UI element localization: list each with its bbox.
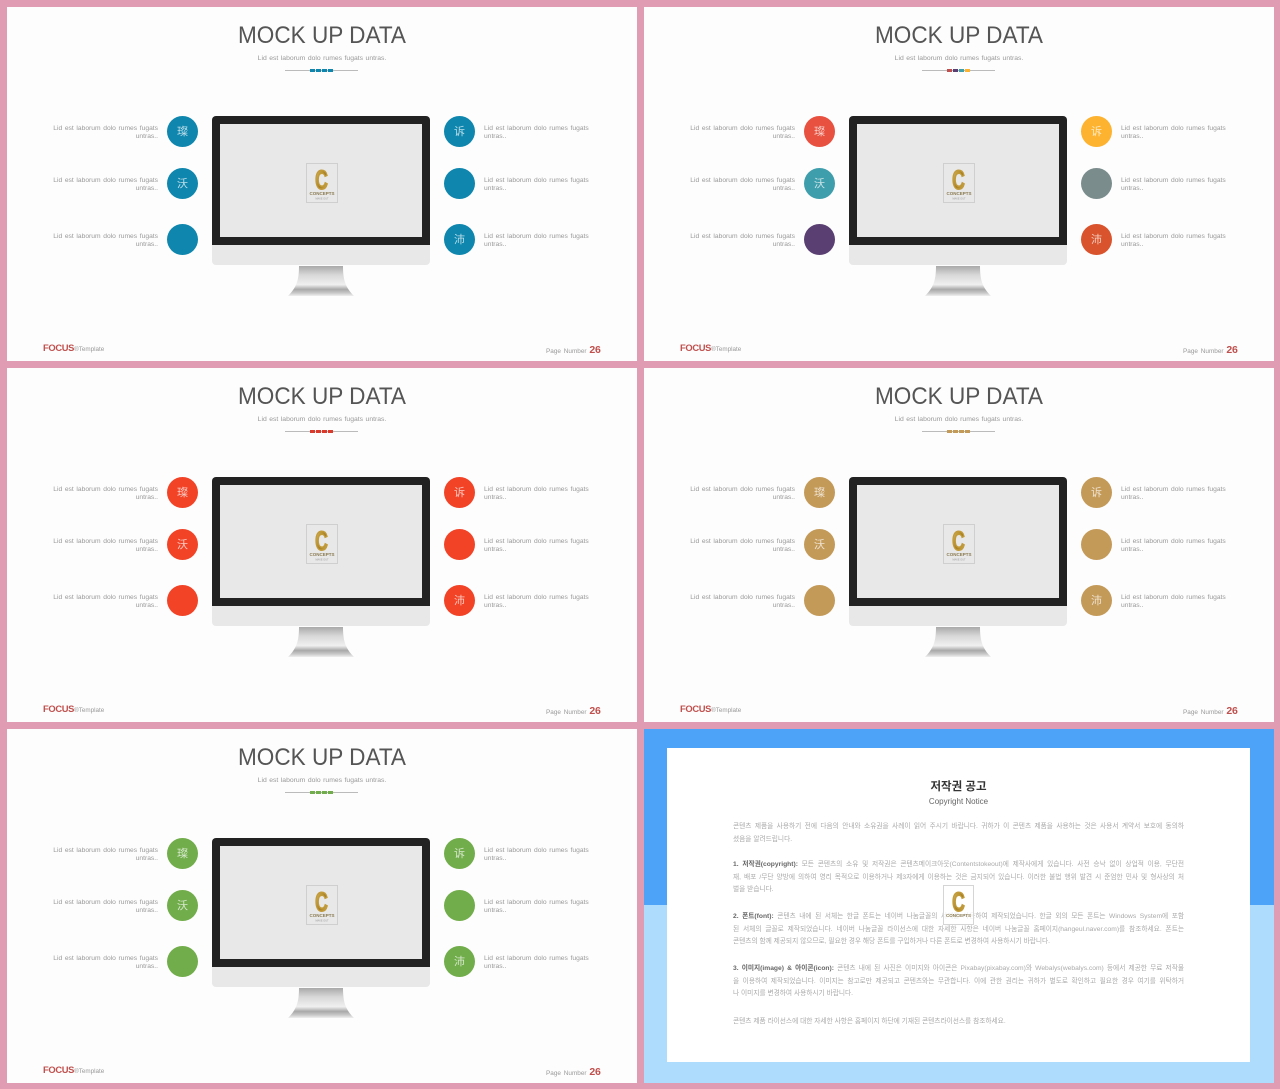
left circle icon 1 bbox=[167, 838, 198, 869]
title: MOCK UP DATA bbox=[875, 382, 1043, 410]
left circle icon 1 bbox=[804, 116, 835, 147]
left text 1: Lid est laborum dolo rumes fugats bbox=[53, 125, 158, 132]
panel: copyright notice bbox=[644, 729, 1274, 1083]
right circle icon 1: 诉 bbox=[454, 487, 465, 499]
left text 3 bbox=[53, 594, 158, 609]
right text 3 bbox=[484, 594, 589, 609]
logo overlay: C bbox=[952, 886, 965, 917]
subtitle: Lid est laborum dolo rumes fugats untras. bbox=[258, 776, 386, 784]
left text 3: untras.. bbox=[773, 241, 795, 248]
left text 3: untras.. bbox=[136, 602, 158, 609]
notice subheading: Copyright Notice bbox=[929, 797, 988, 806]
section 1 copyright bbox=[733, 859, 1184, 897]
left text 1 bbox=[53, 486, 158, 501]
right text 1 bbox=[484, 486, 589, 501]
left text 3: Lid est laborum dolo rumes fugats bbox=[690, 233, 795, 240]
left text 2: Lid est laborum dolo rumes fugats bbox=[690, 538, 795, 545]
right text 1 bbox=[484, 847, 624, 862]
left text 3 bbox=[53, 233, 158, 248]
monitor mockup: MAKE OUT bbox=[315, 920, 329, 922]
monitor mockup: MAKE OUT bbox=[952, 558, 966, 562]
monitor mockup: C bbox=[952, 525, 965, 556]
subtitle: Lid est laborum dolo rumes fugats untras. bbox=[895, 416, 1023, 422]
left text 3: untras.. bbox=[773, 602, 795, 609]
right circle icon 1: 诉 bbox=[454, 848, 465, 860]
left text 2: untras.. bbox=[136, 546, 158, 553]
intro paragraph bbox=[733, 821, 1184, 846]
title: MOCK UP DATA bbox=[238, 744, 406, 770]
right text 1: untras.. bbox=[1121, 133, 1143, 140]
monitor mockup: CONCEPTS bbox=[946, 552, 972, 557]
subtitle: Lid est laborum dolo rumes fugats untras. bbox=[895, 54, 1023, 62]
left circle icon 2 bbox=[167, 529, 198, 560]
right text 3 bbox=[1121, 233, 1226, 248]
right text 3: Lid est laborum dolo rumes fugats bbox=[484, 594, 589, 601]
right text 1: untras.. bbox=[484, 855, 506, 862]
left text 3: Lid est laborum dolo rumes fugats bbox=[53, 594, 158, 601]
left text 3: Lid est laborum dolo rumes fugats bbox=[53, 955, 158, 962]
right text 1: untras.. bbox=[484, 494, 506, 501]
left circle icon 2 bbox=[167, 890, 198, 921]
left circle icon 2: 沃 bbox=[814, 539, 825, 551]
left text 3: untras.. bbox=[136, 963, 158, 970]
right text 1: untras.. bbox=[484, 133, 506, 140]
footer brand: FOCUS®Template bbox=[43, 342, 104, 353]
panel: slide 2 multicolour bbox=[644, 7, 1274, 361]
left text 1 bbox=[690, 125, 795, 140]
monitor mockup: MAKE OUT bbox=[315, 558, 329, 562]
footer brand: FOCUS®Template bbox=[680, 342, 741, 353]
right text 2 bbox=[484, 177, 589, 192]
left circle icon 2 bbox=[804, 529, 835, 560]
left circle icon 3 bbox=[167, 585, 198, 616]
monitor mockup: MAKE OUT bbox=[952, 198, 966, 200]
left text 1: Lid est laborum dolo rumes fugats bbox=[53, 847, 158, 854]
left text 1: Lid est laborum dolo rumes fugats bbox=[53, 486, 158, 493]
monitor mockup: MAKE OUT bbox=[315, 198, 329, 200]
right text 2 bbox=[484, 538, 589, 553]
right circle icon 2 bbox=[1081, 529, 1112, 560]
right text 3: Lid est laborum dolo rumes fugats bbox=[1121, 594, 1226, 601]
right circle icon 1 bbox=[1081, 116, 1112, 147]
intro paragraph: 셨음을 알려드립니다. bbox=[733, 836, 792, 843]
left circle icon 1 bbox=[167, 116, 198, 147]
right text 3 bbox=[1121, 594, 1226, 609]
title: MOCK UP DATA bbox=[238, 382, 406, 410]
section 3 image and icon bbox=[733, 963, 1184, 1001]
left text 2 bbox=[7, 899, 158, 914]
section 3 image and icon: 3. 이미지(image) & 아이콘(icon): 콘텐츠 내에 된 사진은 이미지와 아이콘은 Pixabay(pixabay.com)와 Webalys(webalys.com) 등에서 제공한 무료 저작물 bbox=[733, 965, 1184, 972]
closing line: 콘텐츠 제품 라이선스에 대한 자세한 사항은 홈페이지 하단에 기재된 콘텐츠라이선스를 참조하세요. bbox=[733, 1018, 1006, 1025]
right text 1: untras.. bbox=[1121, 494, 1143, 501]
monitor mockup: C bbox=[315, 525, 328, 556]
logo overlay: CONCEPTS bbox=[946, 913, 971, 918]
right circle icon 1 bbox=[444, 477, 475, 508]
right text 2 bbox=[484, 899, 624, 914]
title: MOCK UP DATA bbox=[238, 22, 406, 48]
right text 3: Lid est laborum dolo rumes fugats bbox=[1121, 233, 1226, 240]
left circle icon 1: 璨 bbox=[177, 126, 188, 138]
section 2 font: 콘텐츠의 함께 제공되지 않으므로, 필요한 경우 해당 폰트를 구입하거나 다른 폰트로 변경하여 사용하시기 바랍니다. bbox=[733, 938, 1050, 945]
left text 3 bbox=[7, 955, 158, 970]
left circle icon 3 bbox=[804, 224, 835, 255]
left text 2 bbox=[53, 177, 158, 192]
monitor mockup: CONCEPTS bbox=[309, 552, 335, 557]
left text 2: Lid est laborum dolo rumes fugats bbox=[53, 899, 158, 906]
right circle icon 2 bbox=[444, 529, 475, 560]
right text 3: Lid est laborum dolo rumes fugats bbox=[484, 233, 589, 240]
subtitle: Lid est laborum dolo rumes fugats untras. bbox=[258, 416, 386, 422]
right circle icon 3 bbox=[444, 224, 475, 255]
right text 2: Lid est laborum dolo rumes fugats bbox=[484, 538, 589, 545]
title divider bbox=[922, 430, 995, 433]
right text 1: Lid est laborum dolo rumes fugats bbox=[484, 125, 589, 132]
left text 2 bbox=[53, 538, 158, 553]
left text 1: untras.. bbox=[136, 855, 158, 862]
left text 1: untras.. bbox=[773, 494, 795, 501]
title divider bbox=[285, 791, 358, 794]
right text 3: untras.. bbox=[484, 963, 506, 970]
right text 2: Lid est laborum dolo rumes fugats bbox=[1121, 177, 1226, 184]
right circle icon 3: 沛 bbox=[1091, 595, 1102, 607]
left text 2: untras.. bbox=[773, 185, 795, 192]
left text 3 bbox=[690, 233, 795, 248]
left text 1 bbox=[690, 486, 795, 501]
left text 3: Lid est laborum dolo rumes fugats bbox=[53, 233, 158, 240]
monitor mockup: CONCEPTS bbox=[946, 191, 972, 196]
left text 2: Lid est laborum dolo rumes fugats bbox=[690, 177, 795, 184]
right text 2: untras.. bbox=[1121, 546, 1143, 553]
left circle icon 2 bbox=[167, 168, 198, 199]
left circle icon 1: 璨 bbox=[177, 848, 188, 860]
right circle icon 3: 沛 bbox=[454, 595, 465, 607]
intro paragraph: 콘텐츠 제품을 사용하기 전에 다음의 안내와 소유권을 사례이 읽어 주시기 바랍니다. 귀하가 이 콘텐츠 제품을 사용하는 것은 사용서 계약서 보호에 동의하 bbox=[733, 823, 1184, 830]
left text 2 bbox=[690, 538, 795, 553]
right circle icon 1 bbox=[444, 838, 475, 869]
left text 2 bbox=[690, 177, 795, 192]
left circle icon 1: 璨 bbox=[814, 487, 825, 499]
footer brand: FOCUS®Template bbox=[680, 703, 741, 714]
left text 2: untras.. bbox=[773, 546, 795, 553]
left circle icon 2: 沃 bbox=[177, 900, 188, 912]
monitor mockup: CONCEPTS bbox=[309, 191, 335, 196]
notice heading: 저작권 공고 bbox=[930, 781, 987, 793]
monitor mockup bbox=[849, 116, 1067, 296]
left text 3: untras.. bbox=[136, 241, 158, 248]
section 3 image and icon: 나 이미지를 변경하여 사용하시기 바랍니다. bbox=[733, 990, 853, 997]
left circle icon 2: 沃 bbox=[177, 539, 188, 551]
monitor mockup bbox=[212, 838, 430, 1020]
monitor mockup bbox=[849, 477, 1067, 657]
right circle icon 3 bbox=[1081, 585, 1112, 616]
right text 1: Lid est laborum dolo rumes fugats bbox=[1121, 486, 1226, 493]
section 2 font: 된 서체의 글꼴로 제작되었습니다. 네이버 나눔글꼴 라이선스에 대한 자세한 사항은 네이버 나눔글꼴 홈페이지(hangeul.naver.com)를 참조하세요. 폰트는 bbox=[733, 926, 1184, 933]
title divider bbox=[285, 430, 358, 433]
right text 1: Lid est laborum dolo rumes fugats bbox=[1121, 125, 1226, 132]
section 3 image and icon: 을 이용하여 제작되었습니다. 이미지는 참고로만 제공되고 콘텐츠와는 무관합니다. 이에 관한 권리는 귀하가 별도로 확인하고 필요한 경우 여기를 위탁하거 bbox=[733, 978, 1184, 985]
right circle icon 3: 沛 bbox=[1091, 234, 1102, 246]
panel: slide 1 teal bbox=[7, 7, 637, 361]
subtitle: Lid est laborum dolo rumes fugats untras. bbox=[258, 54, 386, 62]
title divider bbox=[922, 69, 995, 72]
left circle icon 2: 沃 bbox=[177, 178, 188, 190]
monitor mockup: C bbox=[315, 886, 328, 917]
notice card bbox=[667, 748, 1250, 1062]
right circle icon 2 bbox=[444, 890, 475, 921]
left circle icon 3 bbox=[167, 946, 198, 977]
page number: Page Number 26 bbox=[546, 705, 601, 717]
right text 1 bbox=[1121, 486, 1226, 501]
right text 2 bbox=[1121, 538, 1226, 553]
right text 2: untras.. bbox=[484, 907, 506, 914]
right text 2: Lid est laborum dolo rumes fugats bbox=[484, 899, 589, 906]
left text 1: untras.. bbox=[136, 494, 158, 501]
right circle icon 1: 诉 bbox=[454, 126, 465, 138]
left text 3 bbox=[690, 594, 795, 609]
right circle icon 2 bbox=[1081, 168, 1112, 199]
right circle icon 1: 诉 bbox=[1091, 487, 1102, 499]
section 1 copyright: 벌을 받습니다. bbox=[733, 886, 774, 893]
monitor mockup: C bbox=[952, 164, 965, 195]
left text 2: Lid est laborum dolo rumes fugats bbox=[53, 177, 158, 184]
right text 3: untras.. bbox=[1121, 241, 1143, 248]
right text 1: Lid est laborum dolo rumes fugats bbox=[484, 847, 589, 854]
right text 2: Lid est laborum dolo rumes fugats bbox=[484, 177, 589, 184]
left circle icon 1: 璨 bbox=[177, 487, 188, 499]
right circle icon 1 bbox=[1081, 477, 1112, 508]
title: MOCK UP DATA bbox=[875, 22, 1043, 48]
left circle icon 1 bbox=[804, 477, 835, 508]
left text 1: Lid est laborum dolo rumes fugats bbox=[690, 486, 795, 493]
right circle icon 2 bbox=[444, 168, 475, 199]
monitor mockup: C bbox=[315, 164, 328, 195]
title divider bbox=[285, 69, 358, 72]
right circle icon 3 bbox=[1081, 224, 1112, 255]
left text 2: Lid est laborum dolo rumes fugats bbox=[53, 538, 158, 545]
left circle icon 1 bbox=[167, 477, 198, 508]
right circle icon 3 bbox=[444, 585, 475, 616]
right text 3: untras.. bbox=[1121, 602, 1143, 609]
monitor mockup bbox=[212, 116, 430, 296]
panel: slide 5 green bbox=[7, 729, 637, 1083]
left circle icon 2 bbox=[804, 168, 835, 199]
monitor mockup bbox=[212, 477, 430, 657]
section 2 font bbox=[733, 911, 1184, 949]
left circle icon 1: 璨 bbox=[814, 126, 825, 138]
left circle icon 3 bbox=[167, 224, 198, 255]
section 1 copyright: 1. 저작권(copyright): 모든 콘텐츠의 소유 및 저작권은 콘텐츠메이크아웃(Contentstokeout)에 제작사에게 있습니다. 사전 승낙 없이 상업적 이용, 무단전 bbox=[733, 861, 1184, 868]
right text 1 bbox=[1121, 125, 1226, 140]
left text 1: untras.. bbox=[773, 133, 795, 140]
right circle icon 1: 诉 bbox=[1091, 126, 1102, 138]
right circle icon 3: 沛 bbox=[454, 956, 465, 968]
left circle icon 3 bbox=[804, 585, 835, 616]
page number: Page Number 26 bbox=[546, 1066, 601, 1078]
footer brand: FOCUS®Template bbox=[43, 703, 104, 714]
right text 3 bbox=[484, 233, 589, 248]
left text 1: Lid est laborum dolo rumes fugats bbox=[690, 125, 795, 132]
left text 2: untras.. bbox=[136, 185, 158, 192]
right text 2: untras.. bbox=[1121, 185, 1143, 192]
right text 1: Lid est laborum dolo rumes fugats bbox=[484, 486, 589, 493]
right text 2: Lid est laborum dolo rumes fugats bbox=[1121, 538, 1226, 545]
right text 1 bbox=[484, 125, 589, 140]
page number: Page Number 26 bbox=[1183, 344, 1238, 356]
right text 2: untras.. bbox=[484, 546, 506, 553]
right text 3: untras.. bbox=[484, 602, 506, 609]
left text 3: Lid est laborum dolo rumes fugats bbox=[690, 594, 795, 601]
monitor mockup: CONCEPTS bbox=[309, 913, 335, 918]
right circle icon 3: 沛 bbox=[454, 234, 465, 246]
left circle icon 2: 沃 bbox=[814, 178, 825, 190]
right text 3 bbox=[484, 955, 624, 970]
footer brand: FOCUS®Template bbox=[43, 1064, 104, 1075]
right text 2: untras.. bbox=[484, 185, 506, 192]
panel: slide 3 red bbox=[7, 368, 637, 722]
section 2 font: 2. 폰트(font): 콘텐츠 내에 된 서체는 한글 폰트는 네이버 나눔글꼴의 서체를 사용하여 제작되었습니다. 한글 외의 모든 폰트는 Windows System에 포함 bbox=[733, 913, 1184, 920]
right circle icon 3 bbox=[444, 946, 475, 977]
right text 2 bbox=[1121, 177, 1226, 192]
panel: slide 4 tan bbox=[644, 368, 1274, 722]
logo overlay bbox=[943, 885, 974, 925]
page number: Page Number 26 bbox=[1183, 705, 1238, 717]
page number: Page Number 26 bbox=[546, 344, 601, 356]
left text 1: untras.. bbox=[136, 133, 158, 140]
left text 2: untras.. bbox=[136, 907, 158, 914]
section 1 copyright: 재, 배포 /무단 양방에 의하여 영리 목적으로 이용하거나 제3자에게 이용하는 것은 금지되어 있습니다. 이러한 불법 행위 발견 시 준엄한 민사 및 형사상의 처 bbox=[733, 874, 1184, 881]
right text 3: untras.. bbox=[484, 241, 506, 248]
left text 1 bbox=[53, 125, 158, 140]
left text 1 bbox=[7, 847, 158, 862]
right circle icon 1 bbox=[444, 116, 475, 147]
right text 3: Lid est laborum dolo rumes fugats bbox=[484, 955, 589, 962]
